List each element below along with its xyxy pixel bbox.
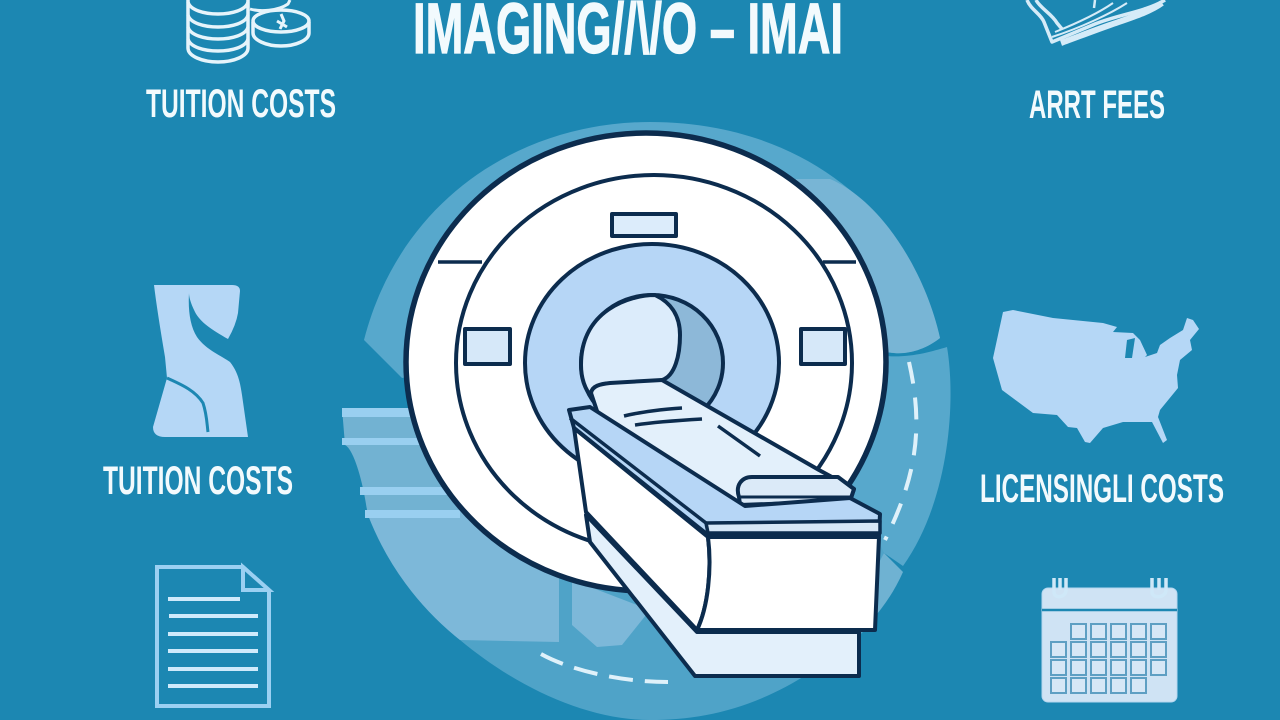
icon: S shape document (153, 285, 248, 437)
label: tuition costs top: TUITION COSTS (146, 82, 336, 126)
MRI machine (406, 133, 886, 676)
icon: calendar (1042, 578, 1177, 702)
icon: document list (157, 567, 269, 706)
label: tuition costs left: TUITION COSTS (103, 459, 293, 503)
label: ARRT fees: ARRT FEES (1029, 83, 1165, 127)
background circle segments (342, 122, 951, 720)
scanner gantry (406, 133, 886, 591)
icon: coin stack (188, 0, 309, 62)
icon: USA map (993, 310, 1199, 443)
patient table (569, 380, 880, 676)
icon: ARRT document (1027, 0, 1165, 43)
